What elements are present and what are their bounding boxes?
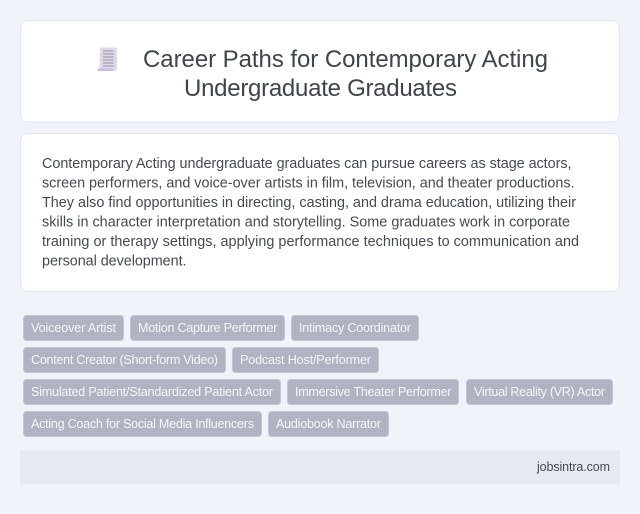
description text: personal development.: [42, 254, 186, 270]
tag: Intimacy Coordinator: [292, 316, 418, 340]
tag: Immersive Theater Performer: Immersive Theater Performer: [295, 385, 452, 399]
tag: Intimacy Coordinator: Intimacy Coordinator: [299, 321, 411, 335]
tag: Content Creator: Content Creator (Short-form Video): [31, 353, 218, 367]
panel: title card: [20, 20, 620, 122]
description text: They also find opportunities in directing, casting, and drama education, utilizing their: [42, 195, 576, 211]
tag: Content Creator: [24, 348, 226, 372]
tag: Podcast Host/Performer: Podcast Host/Performer: [240, 353, 371, 367]
tag: Motion Capture Performer: Motion Capture Performer: [138, 321, 278, 335]
title: Career Paths for Contemporary Acting: [143, 46, 548, 73]
footer source text: jobsintra.com: [536, 460, 610, 474]
description text: Contemporary Acting undergraduate graduates can pursue careers as stage actors,: [42, 156, 572, 172]
tag: Voiceover Artist: [24, 316, 124, 340]
tag: Podcast Host/Performer: [232, 348, 378, 372]
tag: Simulated Patient: [24, 380, 280, 404]
tag: Voiceover Artist: Voiceover Artist: [31, 321, 116, 335]
tag: Virtual Reality Actor: Virtual Reality (VR) Actor: [474, 385, 605, 399]
tag: Acting Coach: Acting Coach for Social Media Influencers: [31, 417, 254, 431]
title: Undergraduate Graduates: [184, 75, 457, 102]
tag: Audiobook Narrator: [268, 412, 388, 436]
tag: Virtual Reality Actor: [466, 380, 612, 404]
title: [143, 46, 548, 102]
tag: Immersive Theater Performer: [288, 380, 458, 404]
description text: [42, 156, 579, 270]
description text: training or therapy settings, applying performance techniques to communication and: [42, 234, 579, 250]
tag: Acting Coach: [24, 412, 262, 436]
description text: skills in character interpretation and storytelling. Some graduates work in corporate: [42, 214, 570, 230]
panel: description: [20, 134, 620, 292]
description text: screen performers, and voice-over artists in film, television, and theater productions.: [42, 176, 574, 192]
icon: paper scroll: [98, 48, 117, 71]
footer bar: [20, 450, 620, 484]
career path tags: [24, 316, 612, 436]
tag: Simulated Patient: Simulated Patient/Standardized Patient Actor: [31, 385, 273, 399]
tag: Motion Capture Performer: [130, 316, 284, 340]
tag: Audiobook Narrator: Audiobook Narrator: [276, 417, 381, 431]
